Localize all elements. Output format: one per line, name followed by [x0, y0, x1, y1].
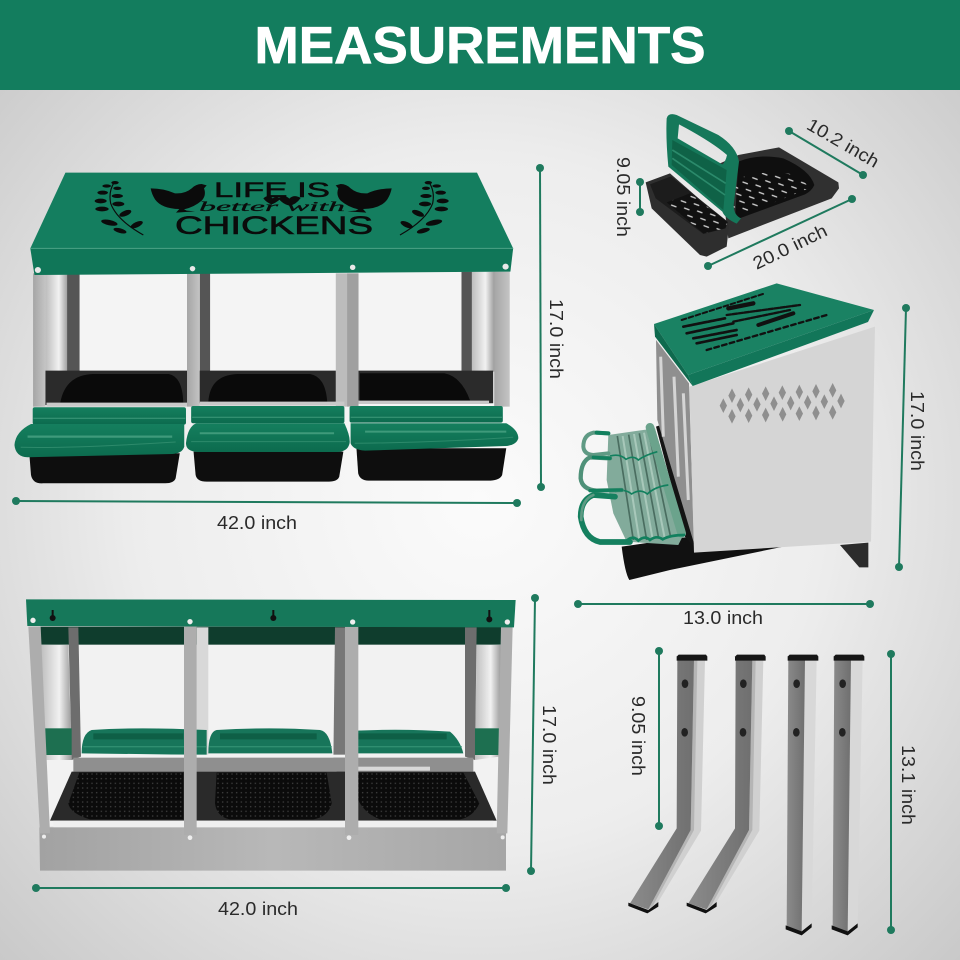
- panel: back view of nesting box: [26, 599, 516, 871]
- straight leg four: [832, 655, 864, 935]
- tray three: [350, 406, 518, 481]
- icon: hearts: [263, 196, 301, 206]
- icon: left chicken: [151, 184, 207, 213]
- left side wall: [41, 627, 81, 760]
- side ribbed trays: [607, 427, 685, 545]
- green handle: [666, 114, 741, 224]
- dimension: tray depth 10.2 inch: [785, 114, 883, 179]
- dimension: back height 17.0 inch: [527, 594, 559, 875]
- dimension: front width 42.0 inch: 42.0 inch: [217, 513, 297, 533]
- panel: front view of nesting box: [14, 173, 518, 483]
- icon: right chicken: [336, 184, 392, 213]
- right side wall: [465, 627, 501, 760]
- dimension: back height 17.0 inch: 17.0 inch: [539, 705, 559, 785]
- opening backdrop: [40, 627, 502, 827]
- dimension: tray height 9.05 inch: 9.05 inch: [613, 157, 633, 237]
- opening backdrop: [45, 272, 496, 372]
- roof artwork icons: [95, 181, 449, 235]
- slogan line: better with: better with: [199, 200, 345, 215]
- floor and bowls: [45, 371, 493, 407]
- icon: left laurel wreath: [95, 181, 144, 235]
- front box: [646, 173, 729, 257]
- inner column: [333, 627, 345, 793]
- dimension: leg 13.1 inch: [887, 650, 918, 934]
- slogan line: CHICKENS: CHICKENS: [175, 212, 373, 240]
- dimension: tray length 20.0 inch: [704, 195, 856, 274]
- roof print: [682, 293, 827, 350]
- perforated bowls: [68, 773, 479, 819]
- handle ribs: [672, 140, 727, 210]
- rear perforated floor: [733, 172, 809, 214]
- side wall: [689, 327, 875, 553]
- ventilation diamonds: [720, 383, 845, 424]
- side tray handles: [581, 433, 630, 542]
- rear plate: [720, 147, 839, 238]
- dimension: front width 42.0 inch: [12, 497, 521, 533]
- dimension: leg 9.05 inch: [628, 647, 663, 830]
- angled leg two: [687, 655, 766, 913]
- tray one: [14, 407, 186, 483]
- dimension: tray height 9.05 inch: [613, 157, 644, 237]
- panel: nest tray with handle: [646, 114, 839, 257]
- dimension: leg 9.05 inch: 9.05 inch: [628, 696, 648, 776]
- title banner: [0, 0, 960, 90]
- angled leg one: [628, 655, 707, 913]
- middle post two: [336, 273, 359, 407]
- title: MEASUREMENTS: [254, 17, 706, 75]
- tray two: [186, 406, 350, 482]
- silver front column: [656, 340, 694, 543]
- straight leg three: [786, 655, 818, 935]
- dimension: side depth 13.0 inch: [574, 600, 874, 628]
- rear green handles: [82, 728, 463, 755]
- panel: legs: [628, 655, 864, 935]
- dark under-roof band: [40, 627, 502, 645]
- dimension: side height 17.0 inch: [895, 304, 927, 571]
- dimension: tray depth 10.2 inch: 10.2 inch: [803, 114, 883, 172]
- middle post one: [187, 273, 210, 407]
- dimension: tray length 20.0 inch: 20.0 inch: [750, 220, 830, 274]
- bottom plate: [39, 827, 506, 871]
- black floor: [50, 772, 497, 821]
- dimension: back width 42.0 inch: 42.0 inch: [218, 899, 298, 919]
- dimension: front height 17.0 inch: [536, 164, 566, 491]
- slogan line: LIFE IS: LIFE IS: [214, 179, 330, 202]
- keyholes and screws: [30, 610, 510, 840]
- right post: [461, 272, 510, 407]
- top green bar: [26, 599, 516, 627]
- roof slogan: [175, 179, 373, 240]
- silver rail: [73, 755, 473, 772]
- panel: side view: [581, 283, 875, 580]
- posts: [28, 627, 513, 835]
- left post: [33, 273, 80, 407]
- dimension: front height 17.0 inch: 17.0 inch: [546, 299, 566, 379]
- side black base and leg: [622, 537, 868, 580]
- roof: [30, 173, 513, 275]
- silver lip strip: [53, 821, 493, 827]
- dimension: side depth 13.0 inch: 13.0 inch: [683, 608, 763, 628]
- black slanted tray edge: [656, 425, 694, 547]
- side roof: [654, 283, 874, 386]
- rear bowl: [735, 156, 814, 220]
- dimension: side height 17.0 inch: 17.0 inch: [907, 391, 927, 471]
- icon: right laurel wreath: [399, 181, 449, 235]
- dimension: leg 13.1 inch: 13.1 inch: [898, 745, 918, 825]
- dimension: back width 42.0 inch: [32, 884, 510, 919]
